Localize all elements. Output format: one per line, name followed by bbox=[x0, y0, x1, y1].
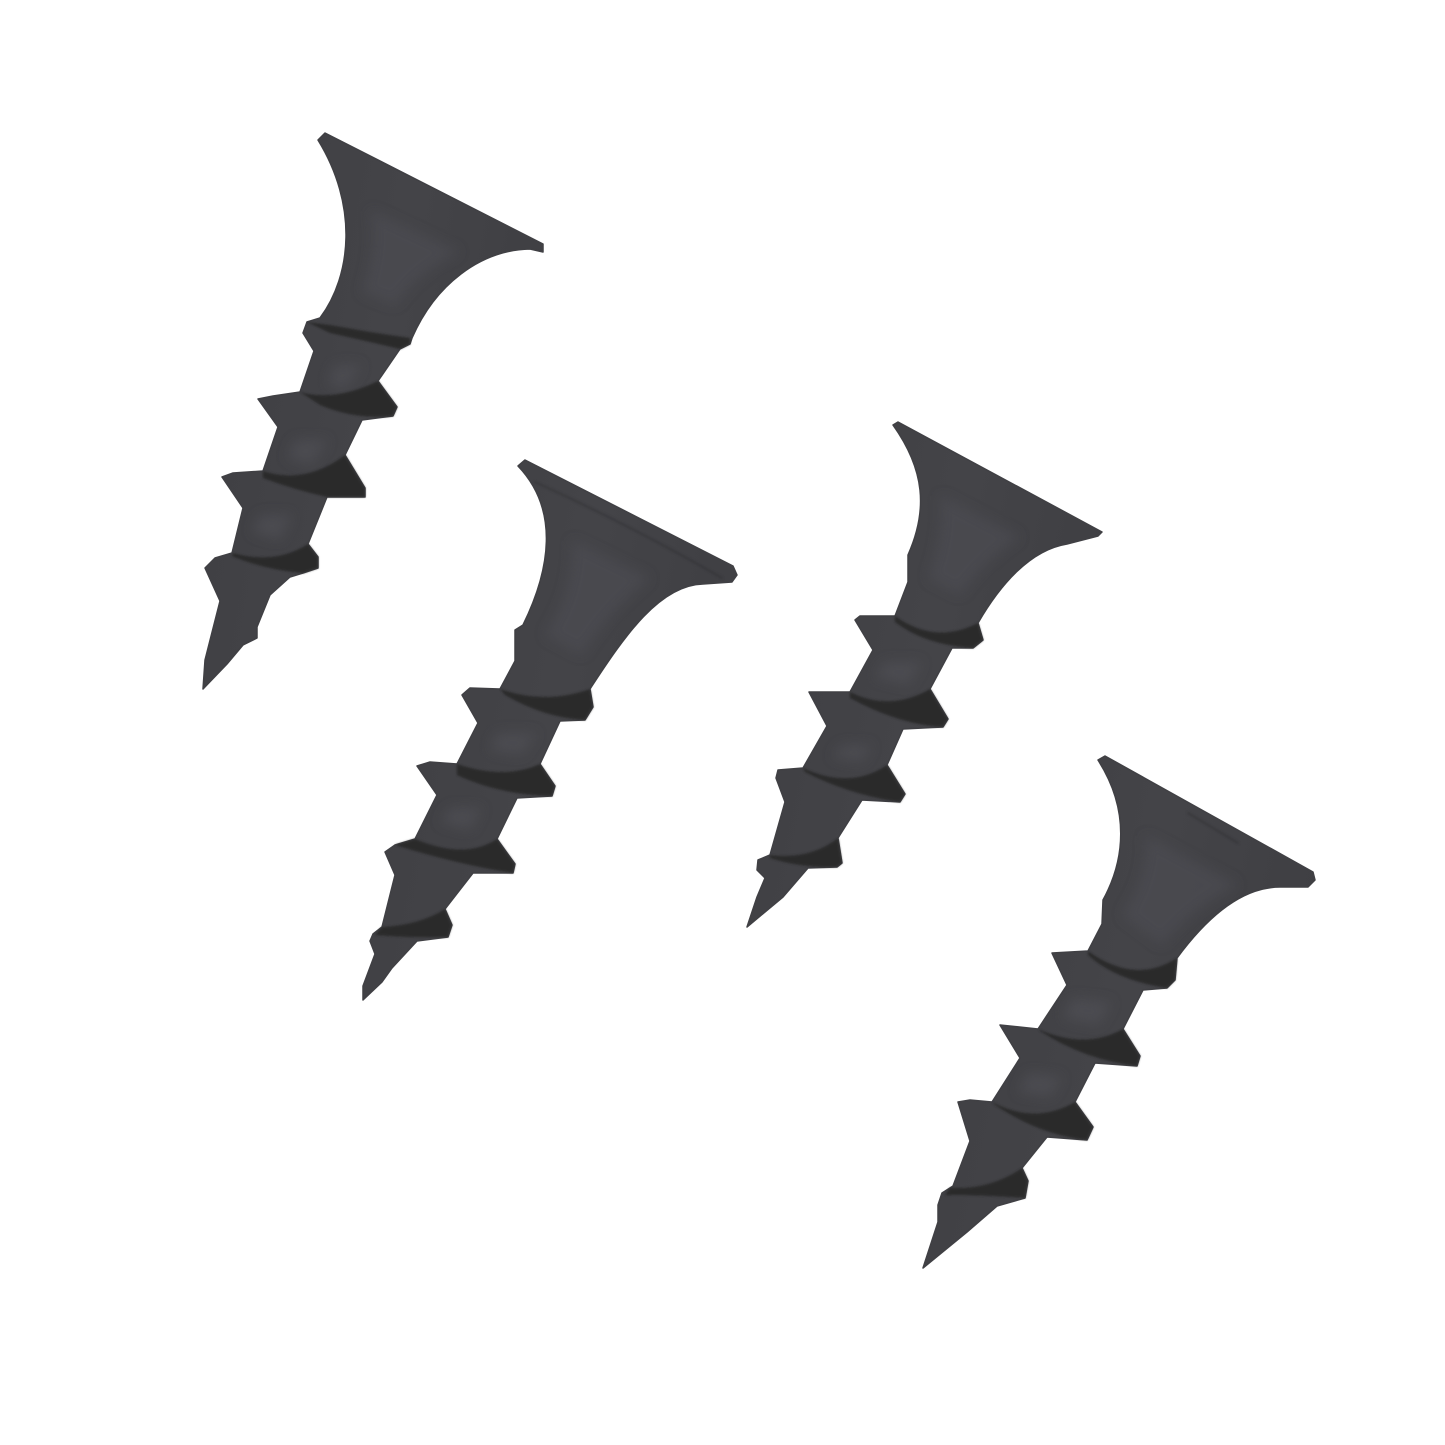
screw 4: bottom right bbox=[923, 756, 1315, 1268]
screw 4 thread bands bbox=[945, 951, 1177, 1198]
screw 3: centre right bbox=[747, 422, 1102, 927]
screw 4 shaft highlights bbox=[1018, 998, 1112, 1097]
screw 1 silhouette bbox=[203, 133, 543, 689]
screw 3 silhouette bbox=[747, 422, 1102, 927]
screw 3 head highlight bbox=[928, 495, 1020, 595]
screw 1 head highlight bbox=[362, 210, 460, 305]
screw 3 shaft highlights bbox=[832, 662, 922, 762]
screw 2 head highlight bbox=[545, 540, 650, 655]
screw 1: top left bbox=[203, 133, 543, 689]
screw 4 head recess bbox=[1188, 813, 1238, 843]
screw 2 thread bands bbox=[375, 689, 593, 937]
screw 2 head rim bbox=[535, 482, 722, 578]
screw 4 silhouette bbox=[923, 756, 1315, 1268]
screw 2 shaft highlights bbox=[440, 733, 537, 830]
screw 1 thread bands bbox=[232, 322, 410, 573]
screw 4 head highlight bbox=[1122, 835, 1238, 945]
screw 2: centre left bbox=[363, 460, 737, 1000]
screw 1 shaft highlights bbox=[252, 365, 362, 540]
screw 2 silhouette bbox=[363, 460, 737, 1000]
screw 3 thread bands bbox=[770, 616, 983, 867]
